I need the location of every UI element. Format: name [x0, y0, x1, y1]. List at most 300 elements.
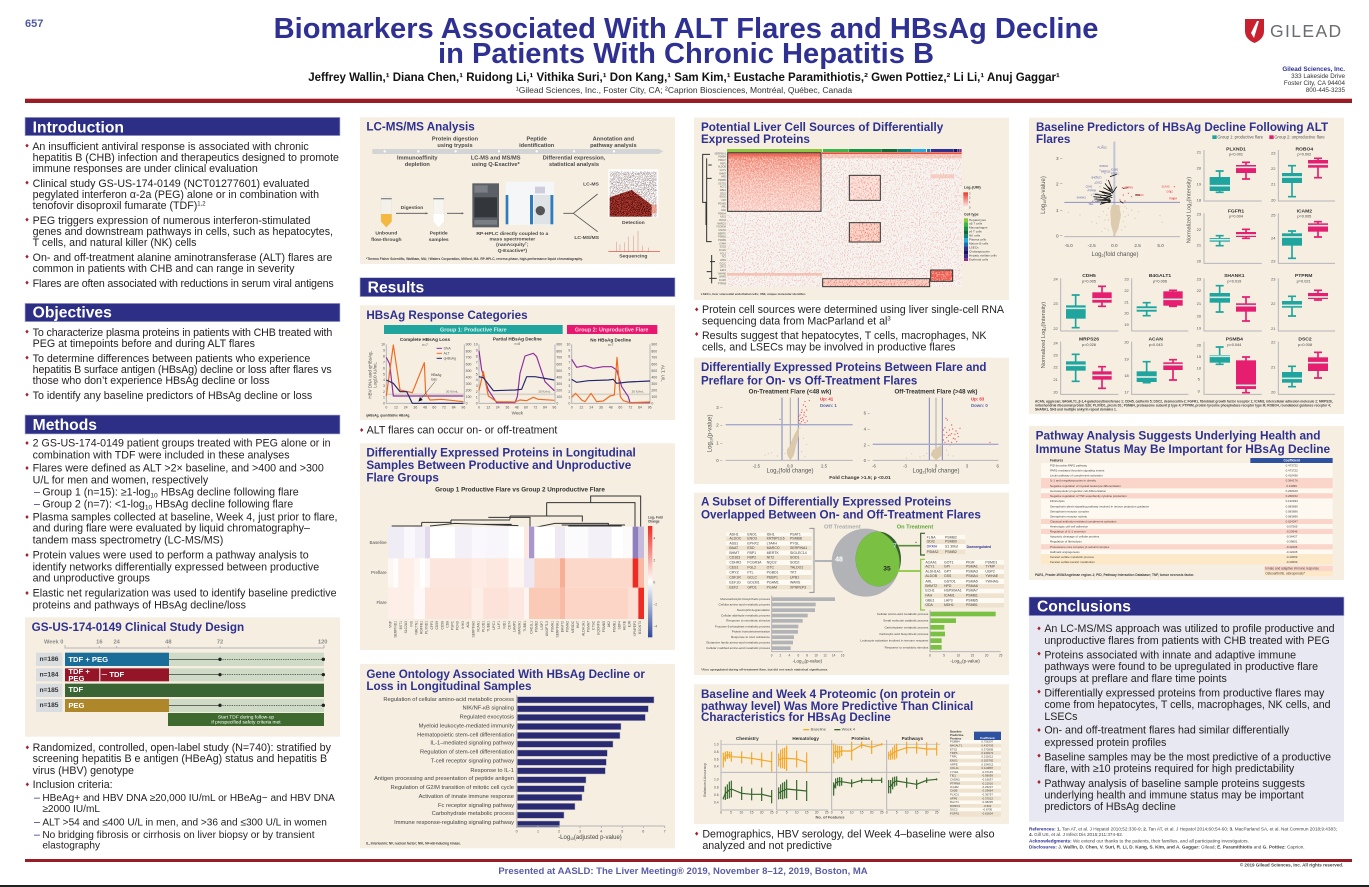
boxplot: CDH5: CDH5 [1082, 273, 1096, 279]
chart: off-treatment pathways: Cellular aldehyde metabolic process [721, 613, 770, 617]
boxplot: PLXND1: 19 [1197, 182, 1202, 187]
overlap lower table: ARL [925, 580, 932, 584]
gene labels: TKT [722, 257, 727, 259]
off-treatment protein table: KRT8P13.6 [767, 537, 785, 541]
gene labels: SOD2 [720, 247, 727, 249]
predictive bullet: Demographics, HBV serology, del Week 4–baseline were also [702, 828, 995, 840]
accuracy small multiples: 5 [896, 810, 898, 814]
overlap lower table: PSMB5 [966, 598, 978, 602]
accuracy small multiples: Proteins [851, 736, 870, 741]
methods bullets: 2 GS-US-174-0149 patient groups treated with PEG alone or in [33, 438, 331, 450]
fork arrows: LC-MS [583, 182, 600, 188]
liver bullets: cells, and LSECs may be involved in productive flares [702, 341, 956, 353]
conclusions bullets: flare, with ≥10 proteins required for high predictability [1044, 763, 1295, 775]
chart axis numbers: 7 [476, 360, 478, 364]
chart axis numbers: 36 [505, 405, 509, 409]
chart: baseline volcano: PLXND1 [1098, 148, 1107, 150]
chart: on-treatment volcano: 1 − [716, 440, 723, 445]
predictor table: 0.756297 [981, 740, 994, 744]
boxplot: PSMB4 [1197, 337, 1262, 394]
LC-MS footnote: *Thermo Fisher Scientific, Waltham, MA; †Waters Corporation, Milford, MA. RP-HPLC, reverse-phase, high-performance liquid chromatography. [366, 257, 583, 261]
chart: baseline volcano: -2.5 [1088, 243, 1096, 248]
study bullets: HBeAg+ and HBV DNA ≥20,000 IU/mL or HBeAg− and HBV DNA [42, 793, 335, 804]
boxplot: SHANK1: 20 [1197, 313, 1202, 318]
accuracy small multiples: 0.6 [714, 757, 719, 761]
chart axis numbers: 5 [568, 372, 570, 376]
chart: on-treatment volcano: 2 − [716, 422, 723, 427]
protein labels: MAN2A1 [518, 621, 522, 634]
boxplot axis titles: 2 [1043, 327, 1047, 329]
accuracy small multiples: 10 [739, 810, 743, 814]
gene labels: FCGR3A [717, 226, 726, 229]
methods bullets: and unproductive groups [33, 573, 150, 585]
pathway title: Pathway Analysis Suggests Underlying Health and [1036, 429, 1320, 443]
axis titles: Week [512, 411, 524, 416]
sequencing spectrum [608, 231, 660, 260]
overlap title [701, 496, 981, 522]
protein labels: MESDC [571, 620, 575, 633]
chart: off-treatment volcano: 6 [996, 463, 999, 468]
row labels: Baseline [369, 540, 387, 545]
chart axis numbers: 0 [466, 402, 468, 406]
off-treatment protein table: IDH1 [767, 532, 775, 536]
chart axis numbers: 700 [466, 356, 472, 360]
gene labels: GOT1 [720, 170, 727, 172]
predictor table: Predictive [950, 733, 964, 737]
off-treatment protein table: FCGR3A [747, 561, 762, 565]
heatmap cells [388, 527, 644, 619]
chart: baseline volcano: 10 [1043, 200, 1047, 204]
accuracy small multiples: 5 [786, 810, 788, 814]
boxplot: SHANK1: 23 [1197, 276, 1202, 281]
protein labels: PSPC [451, 620, 455, 630]
accuracy small multiples: 5 [730, 810, 732, 814]
chart axis numbers: 900 [466, 343, 472, 347]
chart: baseline volcano: TIE1 [1088, 204, 1094, 206]
predictor table: -0.26237 [982, 785, 993, 789]
legend: NK cells [969, 234, 981, 238]
protein labels: LAMP2 [513, 621, 517, 632]
chart: baseline volcano: 2.5 [1134, 243, 1141, 248]
conclusions bullets: On- and off-treatment flares had similar differentially [1044, 725, 1290, 737]
introduction bullets: PEG triggers expression of numerous interferon-stimulated [33, 215, 311, 227]
chart: off-treatment pathways: 12 [823, 653, 827, 657]
color bar: Log₂ Fold [648, 516, 663, 520]
panel: overlap between on- and off-treatment flares [694, 493, 1009, 675]
chart: on-treatment pathways: Leukocyte activation involved in immune response [860, 639, 929, 643]
boxplot: B4GALT1: 19 [1124, 322, 1130, 327]
boxplot: CDH5: 22 [1053, 326, 1059, 331]
predictor table: TRPL [950, 755, 958, 759]
study arms: PEG [68, 674, 85, 683]
predictor table: Baseline [950, 730, 962, 734]
chart: off-treatment pathways: 16 [841, 653, 845, 657]
boxplot: FGFR1: 20 [1197, 258, 1202, 263]
sequencing spectrum: Sequencing [619, 254, 647, 260]
overlap lower table: UGP2 [985, 570, 995, 574]
row labels: Preflare [371, 570, 387, 575]
pathway table: PID thrombin:PAR1 pathway [1050, 464, 1088, 468]
overlap lower table: ALDH1A1 [925, 570, 941, 574]
conclusions bullets [1037, 623, 1335, 813]
group legend [1212, 135, 1325, 140]
footer [0, 859, 1369, 887]
fork arrows: LC-MS/MS [574, 235, 600, 241]
boxplot: ROBO4: 22 [1271, 166, 1276, 171]
sample tubes [371, 197, 464, 243]
legend: Hepatocytes [969, 218, 986, 222]
study arms: n=185 [39, 702, 59, 709]
chart: off-treatment pathways: Neutrophil degranulation [737, 608, 770, 612]
pathway table: -0.07569 [1286, 525, 1298, 529]
boxplot: ICAM2: p=0.005 [1297, 215, 1311, 219]
pathway table: -0.43669 [1286, 560, 1298, 564]
chart axis numbers: 0 [568, 402, 570, 406]
boxplot: DSC2 [1271, 337, 1335, 394]
pathway table: 0.083696 [1286, 515, 1298, 519]
accuracy small multiples: 0.6 [714, 793, 719, 797]
workflow steps: using trypsis [437, 143, 473, 149]
boxplot: SHANK1: SHANK1 [1224, 273, 1245, 279]
conclusions [1029, 597, 1344, 868]
conclusions bullets: groups at preflare and flare time points [1044, 673, 1227, 685]
heading: Methods [25, 415, 340, 434]
workflow steps: depletion [405, 162, 430, 168]
boxplot: PSMB4: 20 [1197, 343, 1202, 348]
protein labels: TUBB1 [523, 621, 527, 632]
pathway table: 0.473722 [1286, 469, 1298, 473]
methods bullets: HBsAg decline following flare [158, 487, 299, 499]
study arms: TDF + PEG [68, 655, 108, 664]
overlap lower table: GPT [944, 570, 952, 574]
accuracy small multiples: 20 [870, 810, 874, 814]
chart axis numbers: 1 [476, 396, 478, 400]
predictors footnote: SHANK1, SH3 and multiple ankyrin repeat domains 1. [1035, 408, 1117, 412]
predictive bullet: analyzed and not predictive [702, 840, 832, 852]
boxplot: CDH5 [1053, 273, 1118, 331]
objectives bullets: To identify any baseline predictors of HBsAg decline or loss [33, 390, 312, 402]
predictor table: -0.07145 [982, 770, 993, 774]
detection scatter: Detection [622, 220, 645, 226]
chart axis numbers: 0 [476, 402, 478, 406]
gene ontology bar chart: Regulated exocytosis [460, 715, 514, 721]
affiliations: ¹Gilead Sciences, Inc., Foster City, CA; ²Caprion Biosciences, Montréal, Québec, Canada [516, 85, 852, 95]
chart axis numbers: 10 [474, 343, 478, 347]
gene ontology bar chart: -Log [558, 835, 570, 841]
legend: Hepatic stellate cells [969, 254, 997, 258]
venn diagram: * [915, 540, 917, 545]
gene labels: ENO1 [720, 197, 727, 199]
predictor table [949, 730, 1001, 817]
chart axis numbers: 48 [515, 405, 519, 409]
boxplot: PLXND1: 18 [1197, 197, 1202, 202]
boxplot: SHANK1: 22 [1197, 288, 1202, 293]
chart: baseline volcano: FGFR1 [1111, 173, 1119, 175]
boxplot: MRPS26: 23 [1053, 352, 1059, 357]
pathway title: Immune Status May Be Important for HBsAg Decline [1036, 442, 1331, 456]
boxplot: PTPRM: 21 [1271, 326, 1276, 331]
introduction bullets: pegylated interferon α-2a (PEG) alone or in combination with [33, 189, 319, 201]
boxplot: PSMB4: 0 [1198, 388, 1201, 393]
accuracy small multiples: 0.4 [714, 765, 719, 769]
chart axis numbers: 84 [452, 405, 456, 409]
chart axis numbers: 2 [568, 390, 570, 394]
gene labels: GBE1 [720, 190, 727, 192]
study bullets: Inclusion criteria: [33, 779, 113, 791]
accuracy small multiples: 15 [805, 810, 809, 814]
chart: baseline volcano: ICAM2 [1111, 168, 1119, 171]
volcano title: Differentially Expressed Proteins Between Flare and [701, 362, 986, 374]
off-treatment protein table: PSMB8 [790, 537, 802, 541]
chart axis numbers: 900 [651, 343, 657, 347]
protein labels: LLP1 [497, 621, 501, 629]
overlap lower table: PSMA5 [966, 580, 978, 584]
predictor table: -0.16637 [982, 777, 993, 781]
methods [25, 415, 340, 612]
off-treatment protein table: EEF1G [729, 580, 741, 584]
boxplot: FGFR1 [1197, 209, 1262, 263]
chart axis numbers: 400 [651, 375, 657, 379]
pathway table: -0.39801 [1286, 540, 1298, 544]
group banners [384, 325, 657, 334]
conclusions bullets: come from hepatocytes, T cells, macrophages, NK cells, and [1044, 699, 1331, 711]
predictor table: PLXD1 [950, 793, 959, 797]
protein labels: EJR [628, 620, 632, 627]
chart: off-treatment pathways: 8 [806, 653, 808, 657]
boxplot axis titles: Normalized Log [1041, 329, 1047, 368]
chart: off-treatment pathways: Cellular modified amino-acid metabolic process [706, 646, 770, 650]
protein labels: NRCTN1 [414, 621, 418, 634]
predictor table: COL11 [950, 766, 959, 770]
off-treatment protein table: ALDOC [729, 537, 742, 541]
methods bullets: combination with TDF were included in these analyses [33, 450, 290, 462]
chart: on-treatment pathways: 5 [943, 653, 945, 657]
gene labels: YWHAE [717, 272, 726, 275]
title: in Patients With Chronic Hepatitis B [438, 38, 934, 70]
sample tubes: flow-through [371, 237, 402, 243]
protein labels: PLXND1 [425, 621, 429, 634]
legend: Cell type [964, 213, 979, 217]
chart: off-treatment volcano: Off-Treatment Flare (>48 wk) [895, 389, 977, 396]
copyright: © 2019 Gilead Sciences, Inc. All rights reserved. [1240, 862, 1343, 868]
gene labels: GCLC [720, 263, 726, 265]
protein labels: PSMA2 [566, 621, 570, 632]
gene ontology bar chart: Activation of innate immune response [419, 794, 514, 800]
pathway table: Features [1050, 459, 1063, 463]
off-treatment protein table: TALDO1 [790, 565, 803, 569]
conclusions bullets: Pathway analysis of baseline sample proteins suggests [1044, 778, 1305, 790]
boxplot: ROBO4 [1271, 147, 1335, 202]
venn diagram [809, 525, 933, 610]
predictor table: ARPE [950, 762, 958, 766]
protein labels: CD8 [445, 621, 449, 628]
gene labels: SERPINA1 [714, 152, 727, 155]
chart: baseline volcano: 2 − [1056, 182, 1063, 187]
icon: Gilead logo [1245, 19, 1343, 43]
pathway table: 0.268169 [1286, 489, 1298, 493]
introduction bullets: tenofovir disoproxil fumarate (TDF) [33, 200, 197, 212]
group banners: Group 1: Productive Flare [440, 328, 507, 334]
off-treatment protein table: FBP2 [747, 556, 756, 560]
chart axis numbers: 12 [486, 405, 490, 409]
mass spectrometer [472, 182, 554, 227]
gene ontology bar chart: 4 [600, 830, 602, 834]
dendrogram [392, 496, 641, 527]
study bullets: screening hepatitis B e antigen (HBeAg) status and hepatitis B [33, 753, 327, 765]
chart: off-treatment pathways [706, 596, 845, 664]
venn diagram: 7 [893, 542, 897, 549]
chart: on-treatment pathways: (p-value) [962, 659, 980, 664]
chart axis numbers: 0 [556, 402, 558, 406]
study bullets: ALT >54 and ≤400 U/L in men, and >36 and ≤300 U/L in women [42, 817, 327, 828]
chart axis numbers: 9 [383, 349, 385, 353]
protein labels: SERPINA2 [471, 621, 475, 637]
gene dendrogram [703, 154, 717, 283]
objectives bullets: To characterize plasma proteins in patients with CHB treated with [33, 327, 332, 339]
legend: γδ T cells [969, 230, 982, 234]
workflow steps: Peptide [526, 137, 547, 143]
chart axis numbers: 24 [589, 405, 593, 409]
predictive title [701, 688, 973, 724]
protein labels: USP7 [540, 621, 544, 630]
chart axis numbers: 400 [466, 375, 472, 379]
protein labels: AK2 [607, 621, 611, 627]
pathway table: Regulation of IL-1 secretion [1050, 530, 1086, 534]
overlap lower table: PSMA4 [966, 574, 978, 578]
chart axis numbers: 300 [556, 382, 562, 386]
chart axis numbers: 0 [383, 402, 385, 406]
pathway table: Fibrinolysis [1050, 499, 1065, 503]
chart: baseline volcano: B4GALT1 [1092, 176, 1102, 179]
panel: HBsAg response categories [360, 305, 675, 420]
venn diagram: 48 [835, 556, 843, 563]
chart: on-treatment pathways: Small molecule catabolic process [883, 619, 929, 623]
methods bullets: HBsAg decline following flare [152, 499, 293, 511]
workflow steps: statistical analysis [549, 162, 599, 168]
legend: Log₂(UMI) [964, 186, 981, 190]
predictors title: Flares [1036, 133, 1070, 146]
overlap lower table: BHMT2 [925, 584, 937, 588]
chart: off-treatment volcano [864, 389, 999, 475]
gene labels: ARL [721, 206, 727, 209]
chart: baseline volcano: VWF [1093, 194, 1099, 196]
protein labels: XPNPEP3 [633, 621, 637, 636]
protein labels: PLOD1 [482, 621, 486, 632]
pathway legend: Innate and adaptive immune response [1265, 567, 1319, 571]
panel: baseline predictors [1029, 118, 1344, 414]
protein labels: BST1 [399, 621, 403, 629]
instrument caption: Q-Exactive*) [498, 248, 527, 254]
boxplot: ACAN: ACAN [1148, 337, 1163, 343]
introduction bullets: Flares are often associated with reductions in serum viral antigens [33, 278, 334, 290]
sample tubes: Digestion [401, 205, 423, 211]
off-treatment protein table: NIT2 [767, 556, 774, 560]
off-treatment protein table: PSAT1 [790, 532, 801, 536]
boxplot: DSC2: 20 [1271, 389, 1276, 394]
chart: no HBsAg decline: 20 IU/mL [632, 390, 644, 394]
chart axis numbers: 800 [466, 349, 472, 353]
predictor table: 0.154012 [981, 762, 994, 766]
chart: complete HBsAg loss: qHBsAg [444, 357, 456, 361]
objectives bullets: To determine differences between patients who experience [33, 353, 310, 365]
chart: off-treatment pathways: (p-value) [804, 659, 823, 664]
off-treatment protein table: BHMT [729, 551, 740, 555]
chart axis numbers: 36 [599, 405, 603, 409]
chart: on-treatment pathways: Carbohydrate metabolic process [884, 625, 929, 629]
chart: off-treatment volcano: 6 − [864, 410, 870, 415]
chart: on-treatment pathways [860, 610, 1003, 664]
methods bullets: 10 [150, 492, 158, 499]
pathway table: Regulation of fibrinolysis [1050, 540, 1082, 544]
boxplot: ICAM2: ICAM2 [1297, 209, 1312, 215]
objectives bullets: PEG at timepoints before and during ALT flares [33, 338, 255, 350]
pathway table: -0.43669 [1286, 555, 1298, 559]
predictor table: B4GALT1 [950, 743, 963, 747]
fold change note: Fold Change >1.5; p <0.01 [829, 475, 891, 481]
boxplot: MRPS26: p=0.026 [1082, 343, 1096, 347]
chart axis numbers: 96 [552, 405, 556, 409]
boxplot: B4GALT1: p=0.006 [1153, 279, 1167, 283]
study bullets: No bridging fibrosis or cirrhosis on liver biopsy or by transient [42, 830, 315, 841]
accuracy small multiples: 0.4 [714, 800, 719, 804]
off-treatment protein table [726, 532, 812, 590]
legend [963, 186, 997, 261]
chart axis numbers: 500 [556, 369, 562, 373]
chart: off-treatment volcano: Up: 83 [971, 397, 985, 402]
introduction bullets: common in patients with CHB and can range in severity [33, 263, 295, 275]
chart axis numbers: 0 [478, 405, 480, 409]
chart: baseline volcano: 2 [1102, 254, 1104, 258]
chart axis numbers: 6 [476, 366, 478, 370]
chart: baseline volcano [1041, 142, 1180, 258]
boxplot: PTPRM [1271, 273, 1335, 331]
off-treatment protein table: ADH1 [729, 532, 739, 536]
chart: baseline volcano: Log [1092, 252, 1102, 258]
panel: pathway analysis [1029, 426, 1344, 580]
gene labels: ICAM1 [719, 249, 727, 252]
methods bullets: – [34, 487, 40, 499]
heading: Results: Results [368, 280, 425, 297]
volcano title: Preflare for On- vs Off-Treatment Flares [701, 375, 917, 387]
references: 4. Gill US, et al. J Infect Dis 2015;211:374-82. [1029, 832, 1123, 837]
methods bullets: 10 [145, 504, 153, 511]
chart axis numbers: 0 [385, 405, 387, 409]
predictor table: Proteins [950, 736, 962, 740]
chart: partial HBsAg decline: Partial HBsAg Decline [493, 337, 542, 342]
accuracy small multiples: 10 [850, 810, 854, 814]
accuracy small multiples: 0.8 [714, 786, 719, 790]
chart: on-treatment volcano: 10 [710, 438, 714, 442]
methods bullets: identify networks differentially expressed between productive [33, 562, 319, 574]
predictor table: 0.430793 [981, 743, 994, 747]
conclusions panel [1029, 616, 1344, 822]
panel: predictive proteomics [694, 684, 1009, 852]
chart axis numbers: 400 [556, 375, 562, 379]
legend: Baseline [811, 727, 827, 732]
boxplot: FGFR1: 21 [1197, 243, 1202, 248]
pathway table: 0.192933 [1286, 499, 1298, 503]
overlap lower table: GSS [944, 574, 952, 578]
chart axis numbers: 5 [383, 372, 385, 376]
overlap lower table: FAH [925, 594, 933, 598]
chart axis numbers: 1 [383, 396, 385, 400]
overlap title: A Subset of Differentially Expressed Proteins [701, 496, 951, 509]
overlap footnote: *Also upregulated during off-treatment flare, but did not reach statistical significance. [701, 668, 828, 672]
chart axis numbers: 800 [556, 349, 562, 353]
chart: on-treatment volcano: 2.5 [821, 463, 828, 468]
protein labels: PSMB2 [535, 621, 539, 632]
overlap top table: Downregulated [967, 545, 991, 549]
